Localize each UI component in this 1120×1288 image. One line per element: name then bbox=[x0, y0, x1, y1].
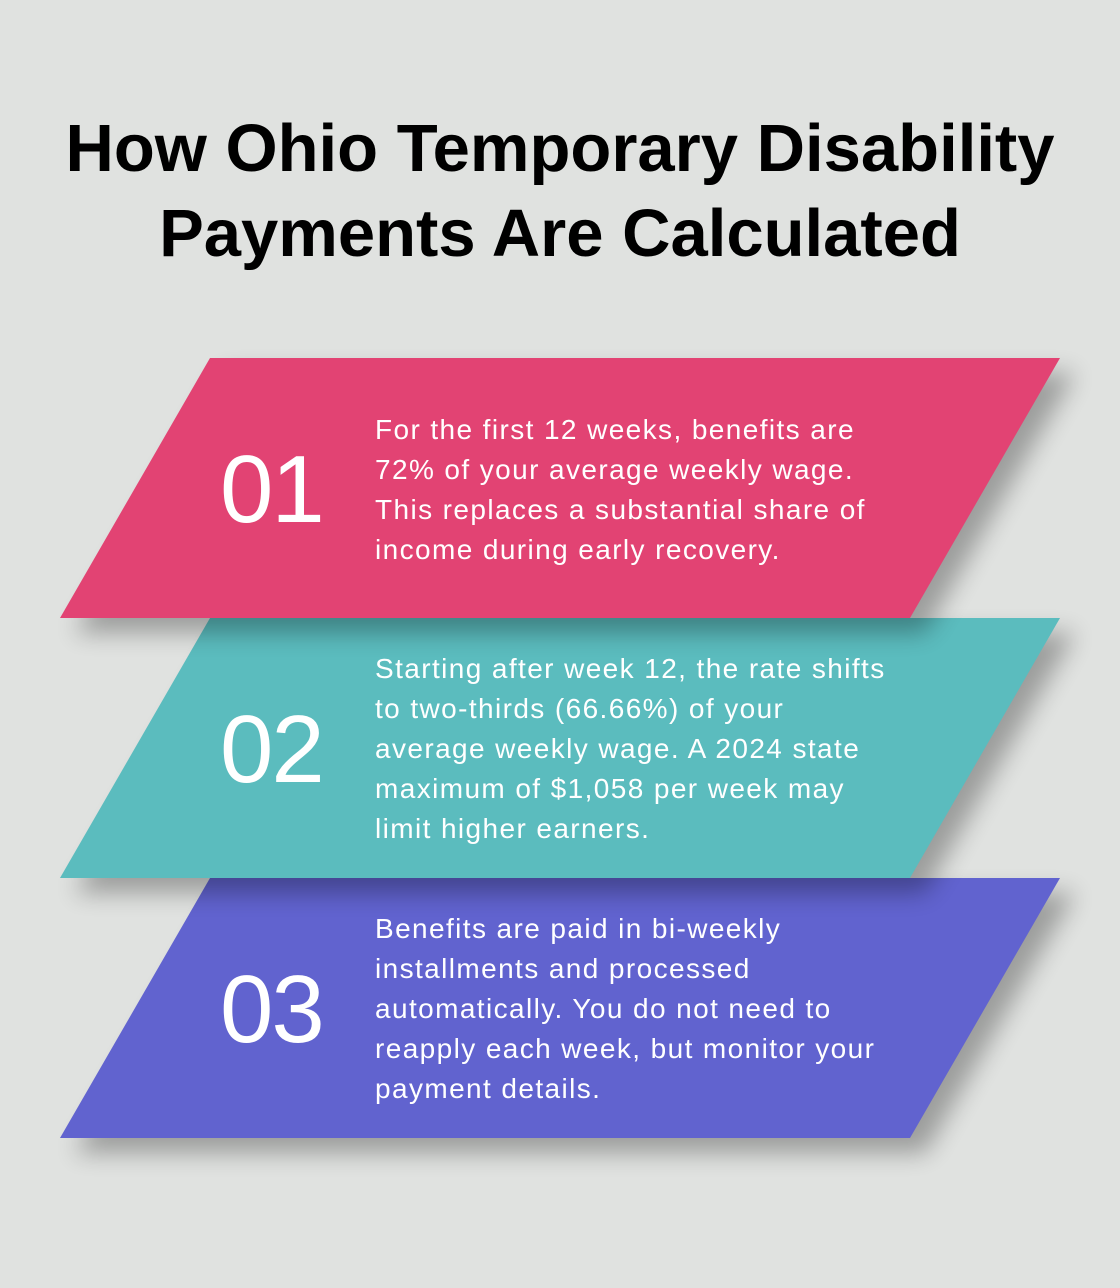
text step 3 bbox=[375, 913, 875, 1104]
title: Payments Are Calculated bbox=[159, 196, 961, 271]
panel: step 2 bbox=[60, 618, 1075, 893]
text step 1: income during early recovery. bbox=[375, 534, 781, 565]
text step 2 bbox=[375, 653, 886, 844]
text step 3: payment details. bbox=[375, 1073, 601, 1104]
text step 2: limit higher earners. bbox=[375, 813, 650, 844]
text step 2: Starting after week 12, the rate shifts bbox=[375, 653, 886, 684]
number 02: 02 bbox=[220, 696, 323, 803]
panel: step 3 bbox=[60, 878, 1075, 1153]
panel: step 1 bbox=[60, 358, 1075, 633]
text step 1: For the first 12 weeks, benefits are bbox=[375, 414, 855, 445]
text step 2: to two-thirds (66.66%) of your bbox=[375, 693, 784, 724]
text step 1 bbox=[375, 414, 866, 565]
number 01: 01 bbox=[220, 436, 323, 543]
text step 3: Benefits are paid in bi-weekly bbox=[375, 913, 781, 944]
number 03: 03 bbox=[220, 956, 323, 1063]
text step 2: maximum of $1,058 per week may bbox=[375, 773, 845, 804]
text step 2: average weekly wage. A 2024 state bbox=[375, 733, 860, 764]
text step 1: 72% of your average weekly wage. bbox=[375, 454, 854, 485]
title bbox=[65, 111, 1055, 271]
text step 3: installments and processed bbox=[375, 953, 751, 984]
text step 3: automatically. You do not need to bbox=[375, 993, 832, 1024]
text step 1: This replaces a substantial share of bbox=[375, 494, 866, 525]
text step 3: reapply each week, but monitor your bbox=[375, 1033, 875, 1064]
title: How Ohio Temporary Disability bbox=[65, 111, 1055, 186]
